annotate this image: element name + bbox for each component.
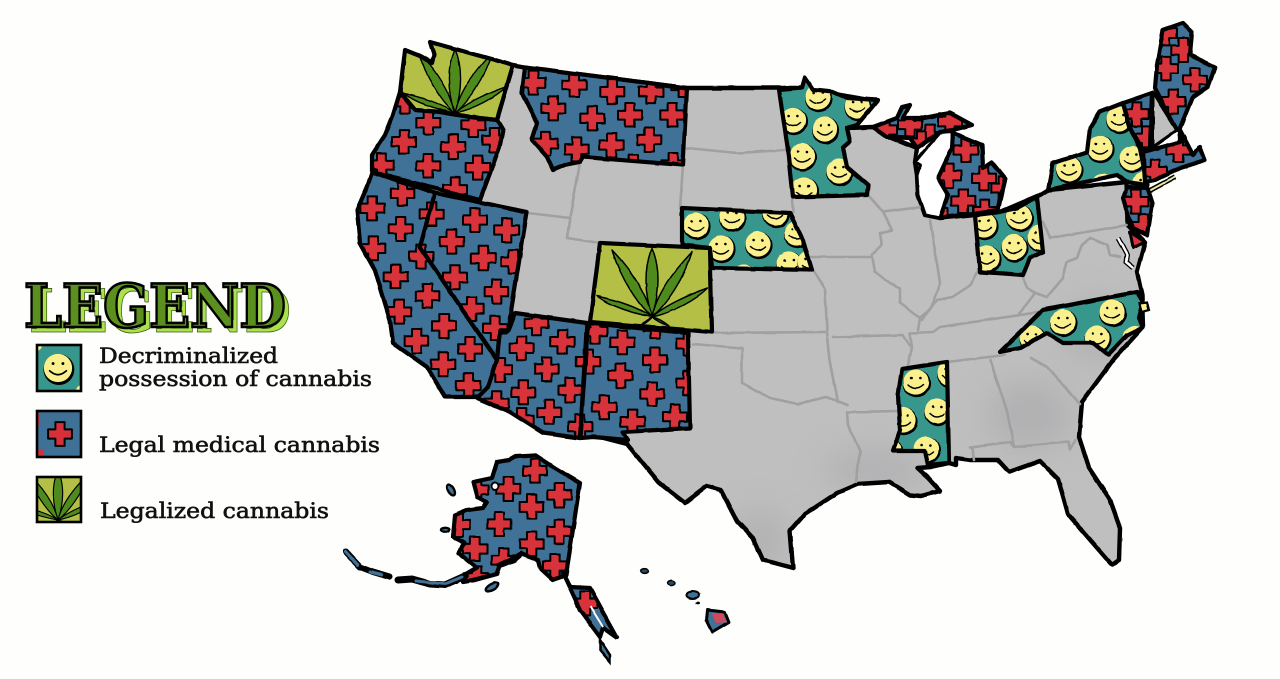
state: Michigan lower peninsula, medical xyxy=(936,131,1008,220)
Alaska panhandle xyxy=(563,573,617,662)
legend item: legalized xyxy=(36,476,328,524)
legend item: medical: Legal medical cannabis xyxy=(99,433,380,458)
state: Vermont, medical xyxy=(1123,93,1159,150)
state: Oregon, medical xyxy=(370,90,506,201)
state: Mississippi, decriminalized xyxy=(890,360,952,466)
state: North Carolina, decriminalized xyxy=(1000,292,1150,355)
state: Nevada, medical xyxy=(409,193,527,360)
Alaskan islands xyxy=(441,483,500,593)
state: Minnesota, decriminalized xyxy=(779,78,878,205)
Long Island xyxy=(1149,177,1175,191)
state: Washington, legalized xyxy=(400,42,513,121)
state: Arizona, medical xyxy=(477,311,600,439)
Alaska mainland xyxy=(446,455,580,590)
state: Montana, medical xyxy=(521,67,695,179)
state: Nebraska, decriminalized xyxy=(679,206,814,272)
Lake Michigan xyxy=(915,132,952,218)
states: New Jersey, Delaware, medical xyxy=(1123,187,1155,248)
state: New Hampshire, gray xyxy=(1153,92,1177,147)
panel: Alaska, medical xyxy=(346,455,617,662)
Hawaii islands xyxy=(641,569,729,632)
legend item: decriminalized: possession of cannabis xyxy=(99,367,372,392)
state: California, medical xyxy=(357,172,497,398)
legend heading: LEGEND xyxy=(24,272,286,342)
state: New Mexico, medical xyxy=(578,320,693,442)
map base: states with no reform in gray xyxy=(478,65,1145,570)
state: Michigan upper peninsula, medical xyxy=(873,105,972,155)
legend item: decriminalized xyxy=(36,344,372,392)
panel: legend xyxy=(15,272,380,526)
gray state borders xyxy=(528,148,1127,482)
legend item: decriminalized: Decriminalized xyxy=(99,344,278,369)
Aleutian Islands xyxy=(346,552,465,585)
legend item: medical xyxy=(37,411,380,458)
state: Maine, medical xyxy=(1153,21,1215,130)
states: Massachusetts, Rhode Island, Connecticut, medical xyxy=(1143,130,1205,184)
Chesapeake Bay xyxy=(1118,238,1133,268)
state: Colorado, legalized xyxy=(590,243,712,332)
legend item: legalized: Legalized cannabis xyxy=(100,499,329,524)
state: New York, decriminalized xyxy=(1046,100,1150,190)
legend heading: LEGEND xyxy=(29,277,291,347)
panel: contiguous United States map xyxy=(357,21,1215,570)
panel: Hawaii, medical xyxy=(641,569,729,632)
state: Ohio, decriminalized xyxy=(973,198,1046,278)
